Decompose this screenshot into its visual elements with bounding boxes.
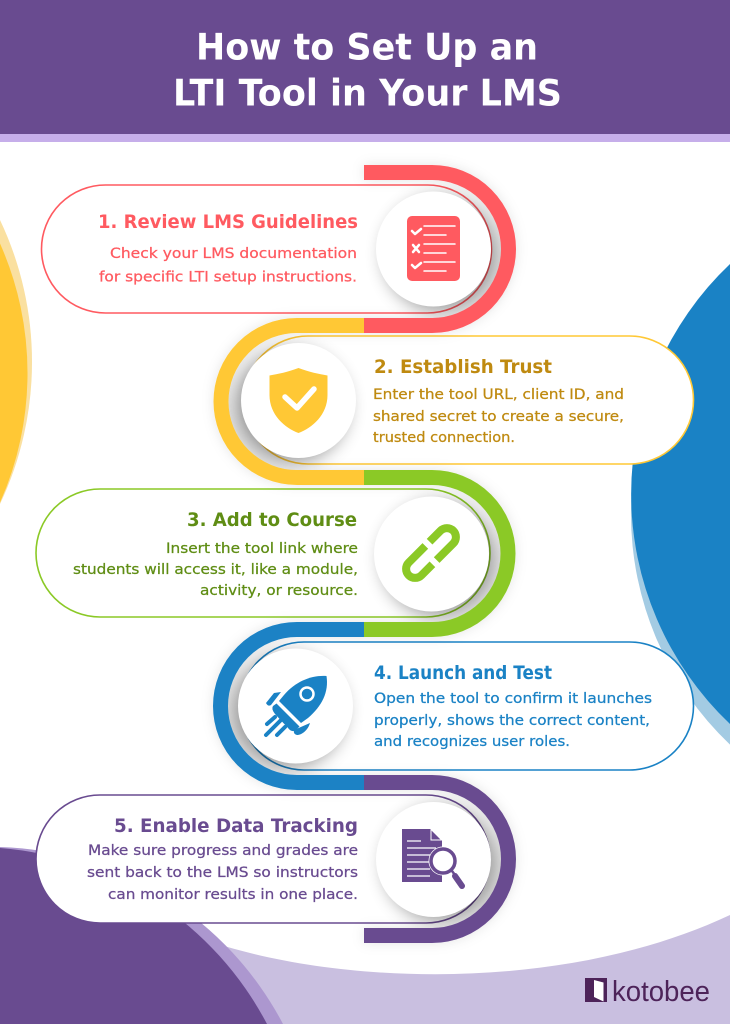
step 1 text [99,246,357,286]
step 4 text: and recognizes user roles. [374,734,570,750]
card 4 outline [240,642,694,770]
purple band [364,782,508,936]
step 3 text: activity, or resource. [200,583,358,599]
step 3 text: Insert the tool link where [166,541,358,557]
step 1 heading: 1. Review LMS Guidelines [98,212,358,233]
step 3 [73,496,489,612]
red band [364,172,508,326]
step 5 heading: 5. Enable Data Tracking [114,816,358,837]
card 3 outline [36,489,490,617]
step 5 text: can monitor results in one place. [108,887,358,903]
step cards outlines [36,185,694,923]
purple circle bottom left [0,847,283,1024]
kotobee logo: kotobee [612,976,710,1008]
step 3 heading: 3. Add to Course [187,510,357,531]
icon circle 1 [376,192,491,306]
title [173,26,562,114]
step 2 heading: 2. Establish Trust [374,357,552,378]
card 5 outline [36,795,490,923]
icon circle 4 [238,648,353,764]
yellow band [221,326,364,478]
step 2 [241,343,624,458]
step 2 text: trusted connection. [373,430,515,446]
step 4 text [374,691,652,750]
step 2 text: Enter the tool URL, client ID, and [373,387,624,403]
step 4 text: properly, shows the correct content, [374,713,650,729]
step 4 [238,648,652,764]
header banner [0,0,730,142]
icon: checklist [407,216,460,281]
connector bands [221,172,509,936]
card 2 outline [244,336,694,464]
step 4 text: Open the tool to confirm it launches [374,691,652,707]
lavender bottom wave [200,915,730,1024]
step 1 text: for specific LTI setup instructions. [99,270,357,286]
step 2 text [373,387,624,446]
step 4 heading: 4. Launch and Test [374,663,552,684]
step 1 text: Check your LMS documentation [110,246,357,262]
icon: shield [270,368,328,433]
step 5 text: sent back to the LMS so instructors [87,865,358,881]
icon circle 5 [376,802,491,917]
icon circle 3 [374,496,489,612]
blue band [221,630,364,782]
icon circle 2 [241,343,356,458]
circle shadows [231,197,498,921]
step 2 text: shared secret to create a secure, [373,409,624,425]
title: How to Set Up an [196,26,538,68]
step 3 text: students will access it, like a module, [73,562,358,578]
green band [364,478,508,630]
step 5 text [87,843,358,903]
icon: rocket [266,676,327,735]
step 1 [98,192,491,306]
card 1 outline [42,185,492,313]
step 5 [87,802,491,917]
blue circle right [631,264,730,745]
yellow circle left [0,220,32,504]
title: LTI Tool in Your LMS [173,72,562,114]
icon: chain link [402,524,460,582]
icon: document with magnifier [402,829,462,886]
background shapes [0,220,730,1024]
step 3 text [73,541,358,599]
step 5 text: Make sure progress and grades are [88,843,358,859]
